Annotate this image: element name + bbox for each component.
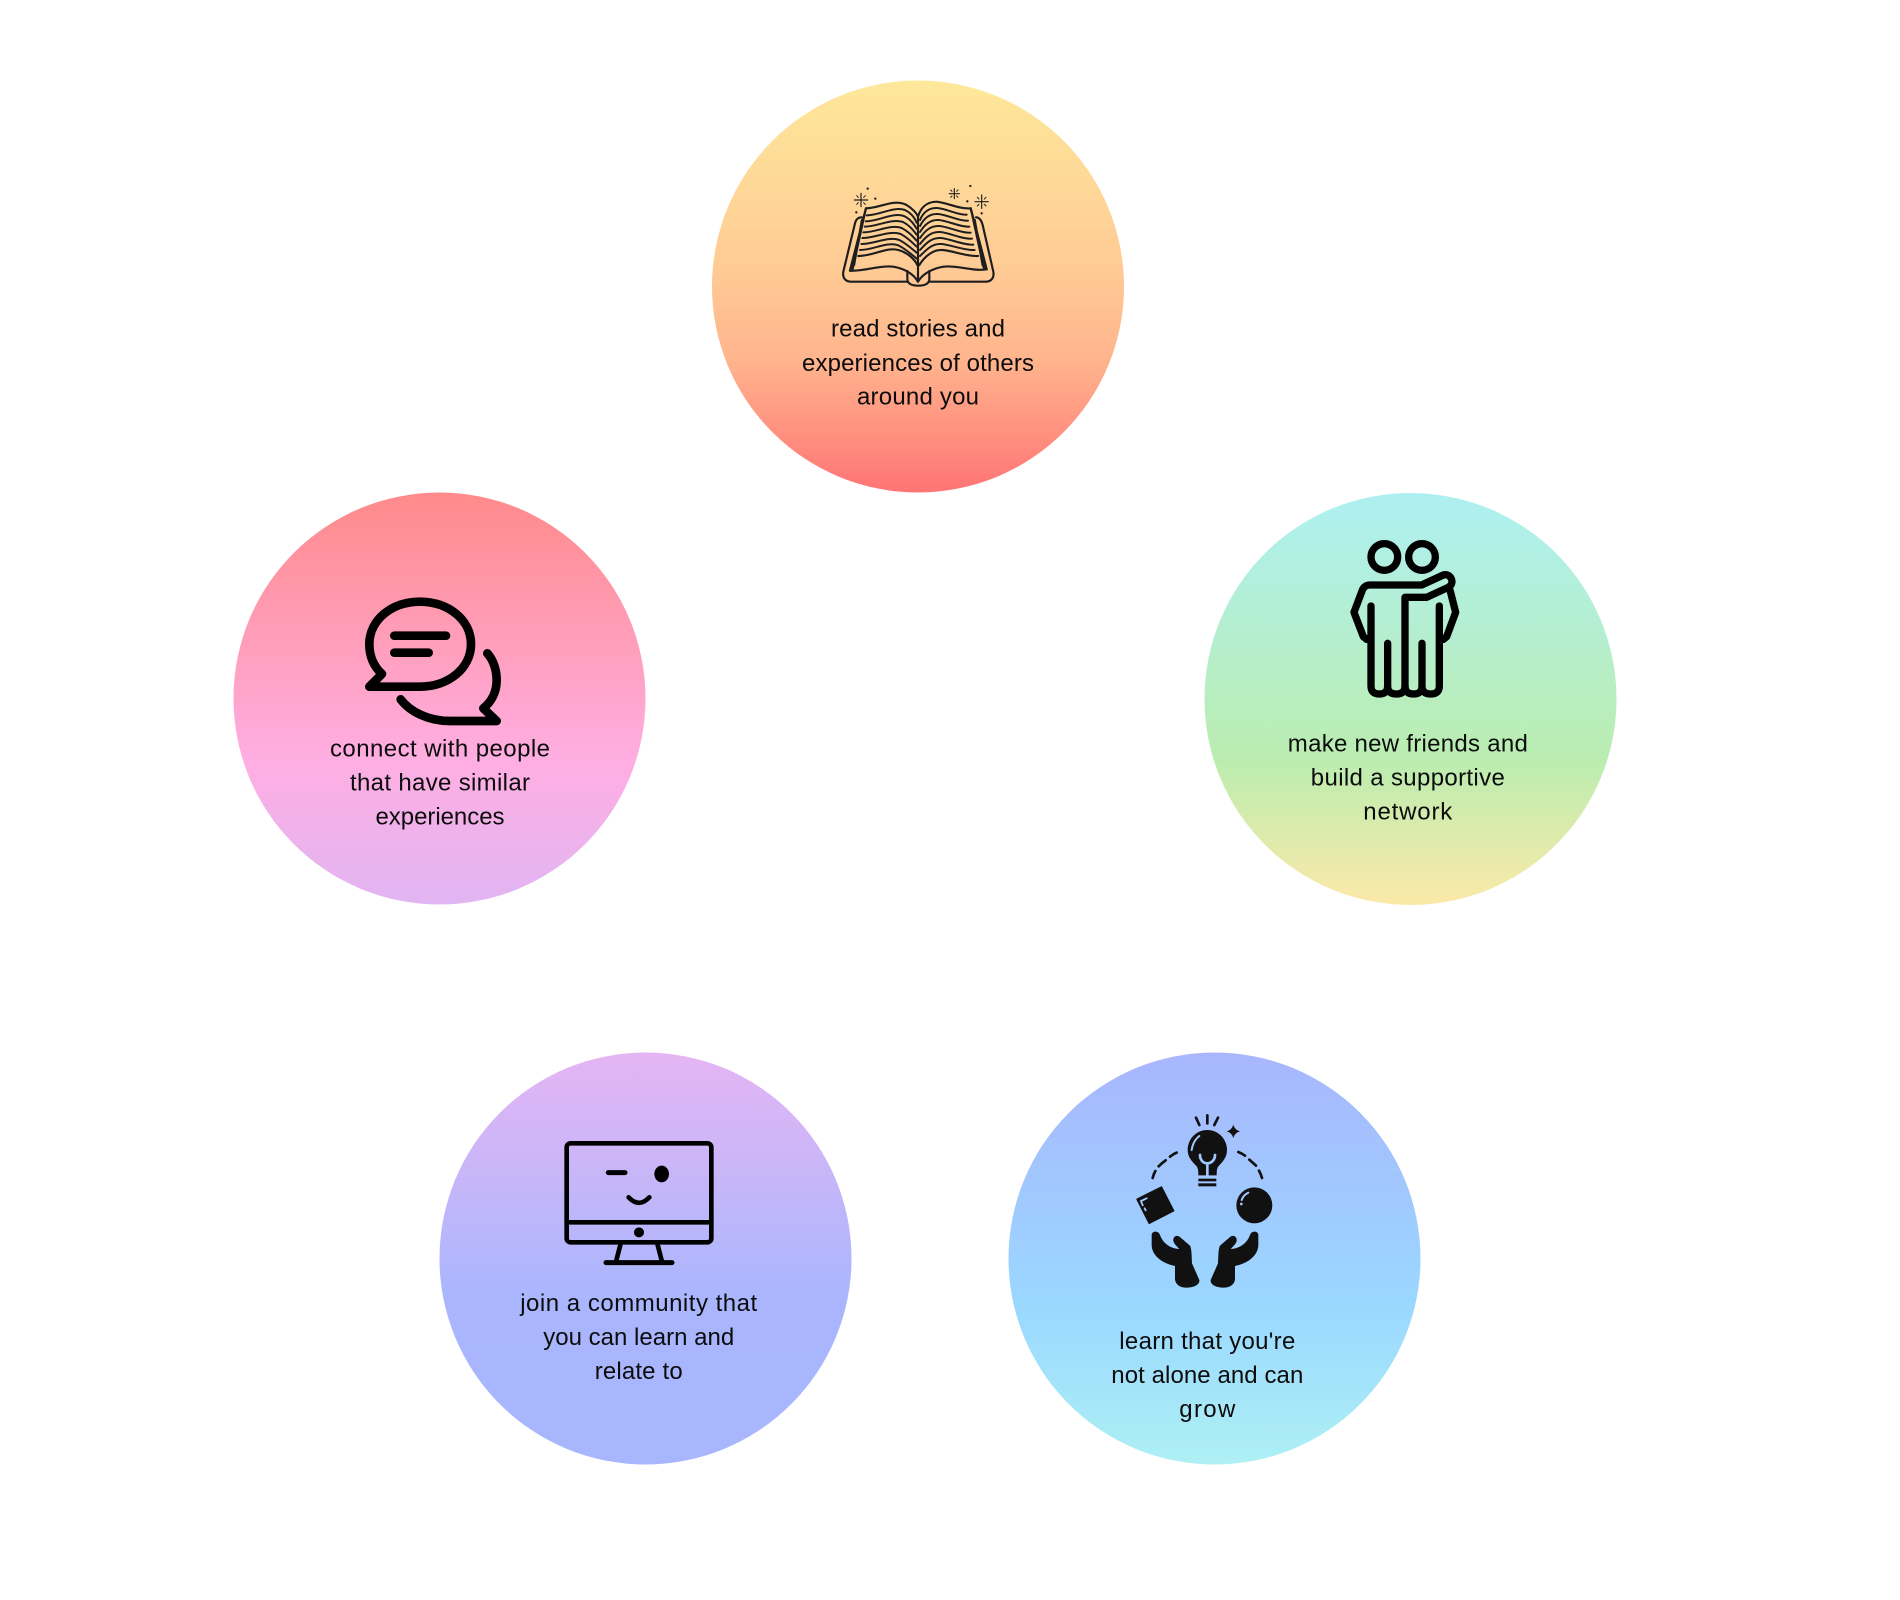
circle: connect background <box>234 492 646 904</box>
text: join a community: relate to <box>595 1358 683 1385</box>
text: learn you're not alone <box>1111 1328 1303 1423</box>
text: connect with people: connect with people <box>330 736 550 763</box>
circle: learn background <box>1008 1052 1420 1464</box>
text: join a community: you can learn and <box>543 1324 734 1351</box>
text: learn you're not alone: learn that you're <box>1119 1328 1295 1355</box>
text: connect with people: that have similar <box>350 770 530 797</box>
panel: join a community <box>440 1052 852 1464</box>
panel: make new friends <box>1204 493 1616 905</box>
panel: learn you're not alone <box>1008 1052 1420 1464</box>
text: make new friends: build a supportive <box>1311 765 1505 792</box>
panel: read stories <box>712 80 1124 492</box>
circle: friends background <box>1204 493 1616 905</box>
text: make new friends: make new friends and <box>1288 731 1528 758</box>
panel: connect with people <box>234 492 646 904</box>
text: join a community <box>519 1290 758 1385</box>
text: learn you're not alone: grow <box>1179 1396 1236 1423</box>
circle: community background <box>440 1052 852 1464</box>
text: connect with people <box>330 736 550 831</box>
text: learn you're not alone: not alone and can <box>1111 1362 1303 1389</box>
text: make new friends <box>1288 731 1528 826</box>
text: make new friends: network <box>1363 799 1453 826</box>
text: read stories <box>802 316 1034 411</box>
text: connect with people: experiences <box>376 804 504 831</box>
text: read stories: around you <box>857 384 979 411</box>
text: read stories: read stories and <box>831 316 1005 343</box>
icon: hands juggling bulb, cube and ball <box>1137 1115 1272 1288</box>
circle: read stories background <box>712 80 1124 492</box>
icon: winking computer monitor <box>567 1143 711 1263</box>
icon: two friends with arm around shoulder <box>1354 544 1456 694</box>
text: join a community: join a community that <box>519 1290 758 1317</box>
icon: speech bubbles <box>369 602 497 721</box>
text: read stories: experiences of others <box>802 350 1034 377</box>
icon: open book with sparkles <box>843 185 994 286</box>
